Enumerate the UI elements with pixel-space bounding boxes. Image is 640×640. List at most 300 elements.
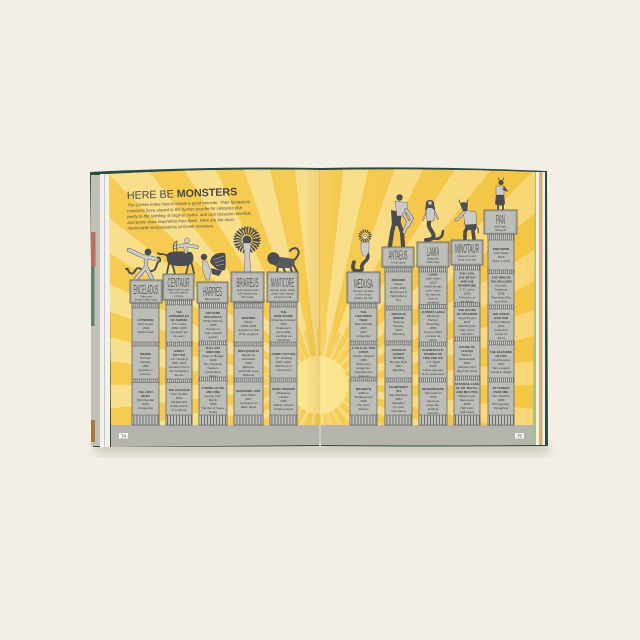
capital: Manticore xyxy=(267,272,298,302)
panel: Pierre: a dream xyxy=(140,372,152,376)
intro text: The Greeks knew how to create a good monster. Their fantastical xyxy=(127,199,251,207)
sun xyxy=(297,356,348,414)
icon: Pan figure xyxy=(495,178,507,210)
capital: Minotaur: body of a man xyxy=(458,257,477,261)
panel: Strange Case of Dr Jekyll and Mr Hyde: 1886 xyxy=(464,402,471,406)
capital: Centaur: Upper half human, xyxy=(167,288,191,292)
panel: The Centaur: John Updike xyxy=(171,392,188,396)
panel: A Song of Ice and Fire: Hoare xyxy=(209,410,217,414)
panel: Jitterbug Perfume: Tom Robbins xyxy=(492,394,510,398)
panel: Narnia: CHRONICLES xyxy=(169,314,189,318)
panel: Paradise Lost: 1667 xyxy=(245,397,252,401)
panel: A Song of Ice and Fire: Symbol of house xyxy=(202,406,225,410)
panel: The Lion, the Witch and the Wardrobe: WARDROBE xyxy=(458,284,476,288)
panel: The House of Asterion: Retelling the xyxy=(459,324,476,328)
panel: Many Waters: Johanna Rees xyxy=(274,407,294,411)
panel: Inferno: Mentioned in xyxy=(390,290,408,294)
panel: Inferno: 1308–1321 xyxy=(391,286,406,290)
column: Centaur xyxy=(158,238,197,425)
icon: Briareus figure xyxy=(234,228,260,272)
panel: Inferno: Dante xyxy=(244,320,253,324)
panel: The Wind in the Willows: THE WILLOWS xyxy=(490,280,512,284)
panel: Macbeth: The three xyxy=(357,403,370,407)
panel: Harry Potter: HARRY xyxy=(174,349,184,353)
panel: The Great God Pan: power of xyxy=(495,332,507,336)
panel: Paradise Lost: John Milton xyxy=(241,393,257,397)
panel: A Tale of Two Cities: Gorgon xyxy=(358,374,369,378)
panel: Harry Potter: HARRY POTTER xyxy=(272,352,296,356)
panel: A Tale of Two Cities: Aristocracy xyxy=(356,362,372,366)
book shadow xyxy=(92,443,550,453)
panel: Fahrenheit 451: 1953 xyxy=(395,397,402,401)
panel: Many Waters: MANY WATERS xyxy=(272,387,295,391)
panel: Elementals: STORIES OF xyxy=(424,352,442,356)
panel: Paradise Lost: fallen angel xyxy=(241,405,257,409)
panel: The Wind in the Willows: Kenneth xyxy=(495,284,507,288)
panel: Hyperion: 1818 xyxy=(142,326,149,330)
text: ENCELADUS xyxy=(134,282,159,297)
panel: The Blessing of Pan: Lord Dunsany xyxy=(492,358,511,362)
capital: Antaeus: A half-giant xyxy=(391,260,405,264)
panel: The Last Unicorn: Peter S. Beagle xyxy=(202,354,224,358)
intro text xyxy=(126,199,252,231)
panel: Harry Potter: mentioned xyxy=(276,368,291,372)
capital: Harpies xyxy=(197,282,228,303)
panel: Harry Potter: Centaurs live in xyxy=(168,365,190,369)
panel: The Great God Pan: Central for xyxy=(494,328,508,332)
panel: The Centaur: Parallel and xyxy=(171,400,187,404)
text: ANTAEUS xyxy=(388,248,408,262)
panel: The Wind in the Willows: THE WIND IN xyxy=(492,276,510,280)
panel: Paradise Lost: PARADISE LOST xyxy=(236,389,261,393)
panel: Aurora Leigh: Barrett xyxy=(428,318,438,322)
panel: The Last Unicorn: harpy xyxy=(209,374,217,378)
capital: Briareus: Left 2 giants and xyxy=(237,288,259,292)
panel: His Dark Materials: Harpies in xyxy=(206,327,220,331)
panel: Antaeus poem: Heaney xyxy=(393,324,404,328)
panel: The Lost Hero: 2010 xyxy=(142,402,149,406)
capital: Medusa: on her head, xyxy=(355,292,372,296)
panel: Aurora Leigh: Great mother xyxy=(424,330,442,334)
panel: The House of Asterion: story of the xyxy=(459,328,475,332)
panel: A Tale of Two Cities: Charles Dickens xyxy=(352,354,375,358)
text: HARPIES xyxy=(203,284,222,299)
text: MEDUSA xyxy=(354,276,373,291)
panel: Lamia: form at xyxy=(428,296,438,300)
page number right: 75 xyxy=(517,434,522,438)
panel: The Wind in the Willows: Grahame xyxy=(495,288,508,292)
capital: Medusa: Gorgon. Snakes xyxy=(353,289,374,293)
capital: Enceladus xyxy=(130,280,162,303)
panel: Antaeus poem: (POEM) xyxy=(393,316,404,320)
column: Pan xyxy=(484,178,517,425)
panel: The Blessing of Pan: Has a pagan xyxy=(492,366,510,370)
column: Lamia xyxy=(417,200,449,425)
panel: Jitterbug Perfume: PERFUME xyxy=(494,390,508,394)
capital: Enceladus: serpent-like limbs xyxy=(135,298,158,302)
panel: A Song of Ice and Fire: Martin xyxy=(209,398,218,402)
open book xyxy=(90,167,548,447)
panel: A Song of Ice and Fire: George R.R. xyxy=(204,394,222,398)
panel: The Lion, the Witch and the Wardrobe: the Witch xyxy=(461,300,474,304)
panel: Don Quixote: Believes xyxy=(243,365,255,369)
panel: Strange Case of Dr Jekyll and Mr Hyde: AND MR HYDE xyxy=(456,390,478,394)
icon: Centaur figure xyxy=(158,238,197,274)
icon: Enceladus figure xyxy=(126,249,160,279)
panel: The Lion, the Witch and the Wardrobe: C.S. Lewis xyxy=(460,288,475,292)
page footer band xyxy=(111,425,533,447)
panel: Lamia: John Keats xyxy=(425,276,441,280)
column: Harpies xyxy=(197,253,228,425)
panel: The Manticore: Character's xyxy=(276,326,292,330)
panel: Jitterbug Perfume: JITTERBUG xyxy=(492,386,510,390)
panel: Antaeus poem: Retelling xyxy=(393,332,405,336)
panel: Neverwhere: 1996 xyxy=(430,395,437,399)
icon: Manticore figure xyxy=(267,248,299,272)
intro text: memorable interpretations of Greek monsters. xyxy=(128,223,214,231)
panel: Macbeth: MACBETH xyxy=(356,387,371,391)
capital: Antaeus xyxy=(382,247,414,267)
panel: Inferno: circle of giants xyxy=(239,332,259,336)
panel: The Last Unicorn: 1968 xyxy=(210,358,217,362)
panel: The Manticore: Robertson Davies xyxy=(271,318,296,322)
column: Briareus xyxy=(231,228,264,425)
capital: Centaur: a horse xyxy=(174,294,184,298)
icon: Minotaur figure xyxy=(456,200,478,239)
text: BRIAREUS xyxy=(236,275,259,290)
panel: The Centaur: in a school xyxy=(172,408,187,412)
page number left xyxy=(119,433,128,438)
panel: Pierre: Appears in xyxy=(138,368,153,372)
panel: The Manticore: 1972 xyxy=(280,322,287,326)
panel: Antaeus poem: ANTAEUS xyxy=(391,312,406,316)
capital: Centaur: the rear half of xyxy=(169,291,188,295)
capital: Centaur xyxy=(163,274,194,300)
panel: Strange Case of Dr Jekyll and Mr Hyde: half beast xyxy=(460,410,474,414)
panel: Fahrenheit 451: and nature xyxy=(391,409,406,413)
panel: The Lightning Thief: antagonist xyxy=(356,334,371,338)
page number right xyxy=(515,433,524,438)
panel: Antaeus poem: Seamus xyxy=(393,320,405,324)
panel: The Lion, the Witch and the Wardrobe: THE WITCH xyxy=(459,276,475,280)
panel: Don Quixote: Cervantes xyxy=(242,357,256,361)
column: Antaeus xyxy=(382,194,414,425)
intro text: creatures have stayed in the human psyche for centuries due xyxy=(127,205,243,213)
panel: Inferno: 31) xyxy=(396,298,401,302)
panel: The Lion, the Witch and the Wardrobe: Followers of xyxy=(459,296,475,300)
panel: Macbeth: witches xyxy=(358,407,369,411)
panel: The Blessing of Pan: OF PAN xyxy=(495,354,507,358)
panel: Narnia: THE xyxy=(176,310,182,314)
panel: Neverwhere: Neil Gaiman xyxy=(425,391,442,395)
page number left: 74 xyxy=(121,434,126,438)
panel: His Dark Materials: Philip Pullman xyxy=(203,319,223,323)
panel: Harry Potter: J.K. Rowling xyxy=(171,357,188,361)
panel: Lamia: 1820 xyxy=(430,280,437,284)
column: Medusa xyxy=(347,231,380,425)
panel: Narnia: OF NARNIA xyxy=(171,318,188,322)
panel: Hyperion: John Keats xyxy=(138,322,154,326)
panel: His Dark Materials: 1995 xyxy=(210,323,217,327)
panel: The Blessing of Pan: 1927 xyxy=(498,362,505,366)
panel: The Lightning Thief: 2005 xyxy=(360,326,367,330)
panel: Antaeus short story: 1961 xyxy=(395,364,402,368)
panel: Don Quixote: Briareus xyxy=(243,373,255,377)
panel: Fahrenheit 451: Metaphor xyxy=(392,401,405,405)
panel: The Manticore: manticore xyxy=(277,338,290,342)
panel: Aurora Leigh: Browning xyxy=(427,322,440,326)
panel: The Great God Pan: Arthur Machen xyxy=(491,320,511,324)
panel: Aurora Leigh: 1856 xyxy=(430,326,437,330)
panel: The Lost Hero: THE LOST xyxy=(138,390,153,394)
capital: Harpies: Bird-women xyxy=(205,297,221,301)
panel: Don Quixote: windmills to be xyxy=(239,369,259,373)
capital: Lamia: Beautiful xyxy=(427,256,439,260)
panel: Many Waters: L'Engle xyxy=(278,395,289,399)
panel: The Wind in the Willows: Pan helps Rat xyxy=(491,296,511,300)
panel: Elementals: Lamia appears xyxy=(423,368,444,372)
panel: Paradise Lost: Compared to xyxy=(240,401,258,405)
capital: Manticore: teeth, lion's body, xyxy=(271,291,294,295)
capital: Minotaur xyxy=(451,240,483,265)
capital: Medusa xyxy=(347,272,380,303)
panel: Harry Potter: J.K. Rowling xyxy=(275,356,292,360)
capital: Briareus xyxy=(231,272,264,302)
panel: The Centaur: 1963 xyxy=(176,396,183,400)
panel: House of Leaves: HOUSE OF xyxy=(459,345,475,349)
column: Manticore xyxy=(267,248,299,425)
capital: Enceladus: Giant with xyxy=(140,294,153,298)
panel: The House of Asterion: 1947 xyxy=(464,320,471,324)
capital: Lamia: child-eater xyxy=(426,260,440,264)
panel: The Last Unicorn: THE LAST xyxy=(206,346,221,350)
capital: Manticore: Human head, sharp xyxy=(270,288,296,292)
panel: Endymion: John Keats xyxy=(493,251,509,255)
panel: Harry Potter: Manticore is xyxy=(275,364,292,368)
panel: Don Quixote: 1605 xyxy=(245,361,252,365)
panel: Hyperion: Referenced xyxy=(138,330,154,334)
panel: Narnia: Centaurs act xyxy=(170,330,188,334)
panel: Lamia: LAMIA xyxy=(428,272,439,276)
panel: The Last Unicorn: pretends to xyxy=(205,370,221,374)
capital: Lamia xyxy=(417,242,449,267)
panel: House of Leaves: Mark Z. xyxy=(462,353,472,357)
panel: Antaeus short story: ANTAEUS xyxy=(391,348,406,352)
panel: The Lightning Thief: Rick Riordan xyxy=(355,322,373,326)
panel: The Great God Pan: 1894 xyxy=(498,324,505,328)
panel: A Tale of Two Cities: antagonist xyxy=(356,366,371,370)
panel: Elementals: 1998 xyxy=(430,364,437,368)
panel: Aurora Leigh: monster as xyxy=(425,334,441,338)
panel: A Tale of Two Cities: Compared to xyxy=(355,370,373,374)
panel: Macbeth: Shakespeare xyxy=(355,395,373,399)
panel: Fahrenheit 451: for man xyxy=(393,405,404,409)
panel: Neverwhere: Lamia as xyxy=(427,399,440,403)
capital: Minotaur: Head of a bull, xyxy=(458,254,477,258)
capital: Medusa: snakes for hair xyxy=(354,296,373,300)
panel: Harry Potter: Forest xyxy=(175,373,183,377)
title: HERE BE MONSTERS xyxy=(127,186,238,202)
panel: Antaeus short story: Borden Deal xyxy=(390,360,407,364)
capital: Pan xyxy=(484,210,517,234)
capital: Pan: PAN xyxy=(496,212,505,227)
panel: Neverwhere: NEVERWHERE xyxy=(422,387,444,391)
panel: His Dark Materials: land of dead xyxy=(205,331,222,335)
panel: Aurora Leigh: Elizabeth xyxy=(427,314,440,318)
panel: Strange Case of Dr Jekyll and Mr Hyde: OF DR JEKYLL xyxy=(456,386,478,390)
capital: Lamia: LAMIA xyxy=(427,244,439,259)
panel: The Blessing of Pan: THE BLESSING xyxy=(490,350,513,354)
capital: Pan: half-goat xyxy=(495,228,506,232)
icon: Harpy figure xyxy=(201,253,226,280)
panel: Lamia: her human xyxy=(426,292,441,296)
panel: The House of Asterion: labyrinth xyxy=(461,332,473,336)
panel: Antaeus short story: STORY) xyxy=(393,356,404,360)
panel: Endymion: Hymn to Pan xyxy=(492,259,510,263)
panel: A Tale of Two Cities: 1859 xyxy=(360,358,367,362)
panel: Lamia: wedding xyxy=(427,300,439,304)
column: Minotaur xyxy=(451,200,483,425)
intro text: and poets draw inspiration from them. Here are the most xyxy=(127,217,235,225)
panel: The Manticore: THE xyxy=(280,310,287,314)
panel: Fahrenheit 451: FAHRENHEIT xyxy=(389,385,408,389)
panel: The Lost Hero: Antagonist xyxy=(138,406,153,410)
panel: Neverwhere: vampire xyxy=(428,411,439,415)
column: Enceladus xyxy=(126,249,162,425)
panel: The Lost Hero: HERO xyxy=(141,394,151,398)
panel: His Dark Materials: guards xyxy=(208,335,218,339)
icon: Medusa figure xyxy=(353,231,370,271)
panel: Jitterbug Perfume: throughout xyxy=(494,406,508,410)
panel: Elementals: ELEMENTALS: xyxy=(422,348,444,352)
icon: Lamia figure xyxy=(423,200,443,240)
panel: Aurora Leigh: AURORA LEIGH xyxy=(421,310,445,314)
panel: Pierre: Melville xyxy=(140,360,151,364)
text: MINOTAUR xyxy=(455,241,479,256)
panel: Harry Potter: POTTER xyxy=(173,353,186,357)
panel: Strange Case of Dr Jekyll and Mr Hyde: Half man, xyxy=(460,406,474,410)
text: MANTICORE xyxy=(271,275,294,290)
panel: Don Quixote: Miguel de xyxy=(242,353,255,357)
panel: Many Waters: Attacks unicorn xyxy=(273,403,294,407)
capital: Briareus: 100 hands and xyxy=(238,291,257,295)
panel: The House of Asterion: THE HOUSE xyxy=(458,308,476,312)
panel: Inferno: INFERNO xyxy=(242,316,256,320)
panel: The Great God Pan: THE GREAT xyxy=(492,312,510,316)
panel: Narnia: C.S. Lewis xyxy=(172,322,187,326)
panel: Aurora Leigh: lamia xyxy=(429,338,437,342)
panel: Pierre: PIERRE xyxy=(140,352,151,356)
panel: The Lightning Thief: Main xyxy=(360,330,367,334)
panel: Pierre: Herman xyxy=(140,356,151,360)
panel: The Centaur: THE CENTAUR xyxy=(168,388,191,392)
panel: The Manticore: personality xyxy=(276,330,291,334)
panel: The Last Unicorn: The character xyxy=(204,362,222,366)
panel: Narnia: as seers xyxy=(173,334,185,338)
panel: Harry Potter: 1997–2007 xyxy=(276,360,291,364)
panel: The Lightning Thief: LIGHTNING xyxy=(355,314,373,318)
panel: Elementals: FIRE AND ICE xyxy=(423,356,443,360)
panel: Neverwhere: drinking xyxy=(428,407,439,411)
panel: Antaeus short story: (SHORT xyxy=(393,352,404,356)
panel: The Great God Pan: GOD PAN xyxy=(494,316,508,320)
panel: Neverwhere: velvet life- xyxy=(426,403,440,407)
panel: The Last Unicorn: UNICORN xyxy=(206,350,220,354)
panel: The Great God Pan: nature xyxy=(497,336,506,340)
panel: The House of Asterion: OF ASTERION xyxy=(457,312,477,316)
panel: The Wind in the Willows: and Mole xyxy=(495,300,508,304)
panel: The Last Unicorn: Celaeno xyxy=(207,366,219,370)
capital: Manticore: scorpion's tail xyxy=(274,295,292,299)
panel: Inferno: 1308–1320 xyxy=(241,324,256,328)
panel: A Tale of Two Cities: A TALE OF TWO xyxy=(352,346,376,350)
panel: Pierre: 1852 xyxy=(142,364,149,368)
panel: Fahrenheit 451: Ray Bradbury xyxy=(389,393,408,397)
panel: The Centaur: retells Chiron xyxy=(170,404,188,408)
panel: His Dark Materials: HIS DARK xyxy=(206,311,221,315)
book cover xyxy=(90,167,548,447)
panel: Elementals: to be seductress xyxy=(422,372,445,376)
text: CENTAUR xyxy=(168,275,190,290)
panel: A Tale of Two Cities: CITIES xyxy=(359,350,368,354)
yellow sunburst background xyxy=(109,169,535,425)
panel: Many Waters: Madeleine xyxy=(276,391,291,395)
panel: House of Leaves: labyrinth motifs xyxy=(457,369,478,373)
panel: Elementals: A.S. Byatt xyxy=(426,360,440,364)
left page stack xyxy=(91,174,110,447)
capital: Briareus: 50 heads xyxy=(242,295,254,299)
panel: Lamia: Sinful female xyxy=(424,284,442,288)
panel: Inferno: Hell (Inferno xyxy=(390,294,407,298)
panel: Jitterbug Perfume: 1984 xyxy=(498,398,505,402)
panel: Inferno: Appears in Hell xyxy=(238,328,259,332)
panel: The Lion, the Witch and the Wardrobe: 1950 xyxy=(464,292,471,296)
panel: The Lightning Thief: THIEF xyxy=(359,318,368,322)
panel: A Song of Ice and Fire: AND FIRE xyxy=(206,390,220,394)
panel: Hyperion: HYPERION xyxy=(138,318,153,322)
panel: Antaeus poem: 1975 xyxy=(395,328,402,332)
panel: The Manticore: manifest as xyxy=(276,334,292,338)
panel: His Dark Materials: MATERIALS xyxy=(204,315,222,319)
panel: The Wind in the Willows: 1908 xyxy=(498,292,505,296)
panel: The House of Asterion: Jorge Borges xyxy=(458,316,477,320)
icon: Antaeus and Hercules figure xyxy=(390,194,412,246)
panel: The Lost Hero: Rick Riordan xyxy=(137,398,155,402)
panel: Narnia: 1950–1956 xyxy=(171,326,187,330)
panel: Lamia: lover, loses xyxy=(425,288,441,292)
panel: Strange Case of Dr Jekyll and Mr Hyde: Stevenson xyxy=(460,398,475,402)
panel: The Blessing of Pan: revival in village xyxy=(490,370,512,374)
panel: The Lion, the Witch and the Wardrobe: AND THE xyxy=(460,280,474,284)
panel: Harry Potter: the Forbidden xyxy=(170,369,189,373)
panel: A Song of Ice and Fire: 1996 xyxy=(210,402,217,406)
panel: The Manticore: MANTICORE xyxy=(274,314,293,318)
panel: Endymion: 1818 xyxy=(498,255,505,259)
capital: Pan: Half-man, xyxy=(494,224,507,228)
intro text: partly to the retelling of original myths, and also because novelists xyxy=(126,211,252,219)
panel: House of Leaves: LEAVES xyxy=(461,349,473,353)
panel: The Lightning Thief: THE xyxy=(360,310,367,314)
panel: Macbeth: 1606 xyxy=(360,399,367,403)
panel: House of Leaves: Minotaur and xyxy=(458,365,476,369)
panel: House of Leaves: 2000 xyxy=(464,361,471,365)
panel: Don Quixote: DON QUIXOTE xyxy=(238,349,259,353)
right page stack xyxy=(533,172,545,445)
panel: Inferno: INFERNO xyxy=(392,278,406,282)
panel: A Song of Ice and Fire: A SONG OF ICE xyxy=(202,386,224,390)
panel: Jitterbug Perfume: Pan appears xyxy=(492,402,510,406)
panel: Harry Potter: 1997–2007 xyxy=(171,361,187,365)
